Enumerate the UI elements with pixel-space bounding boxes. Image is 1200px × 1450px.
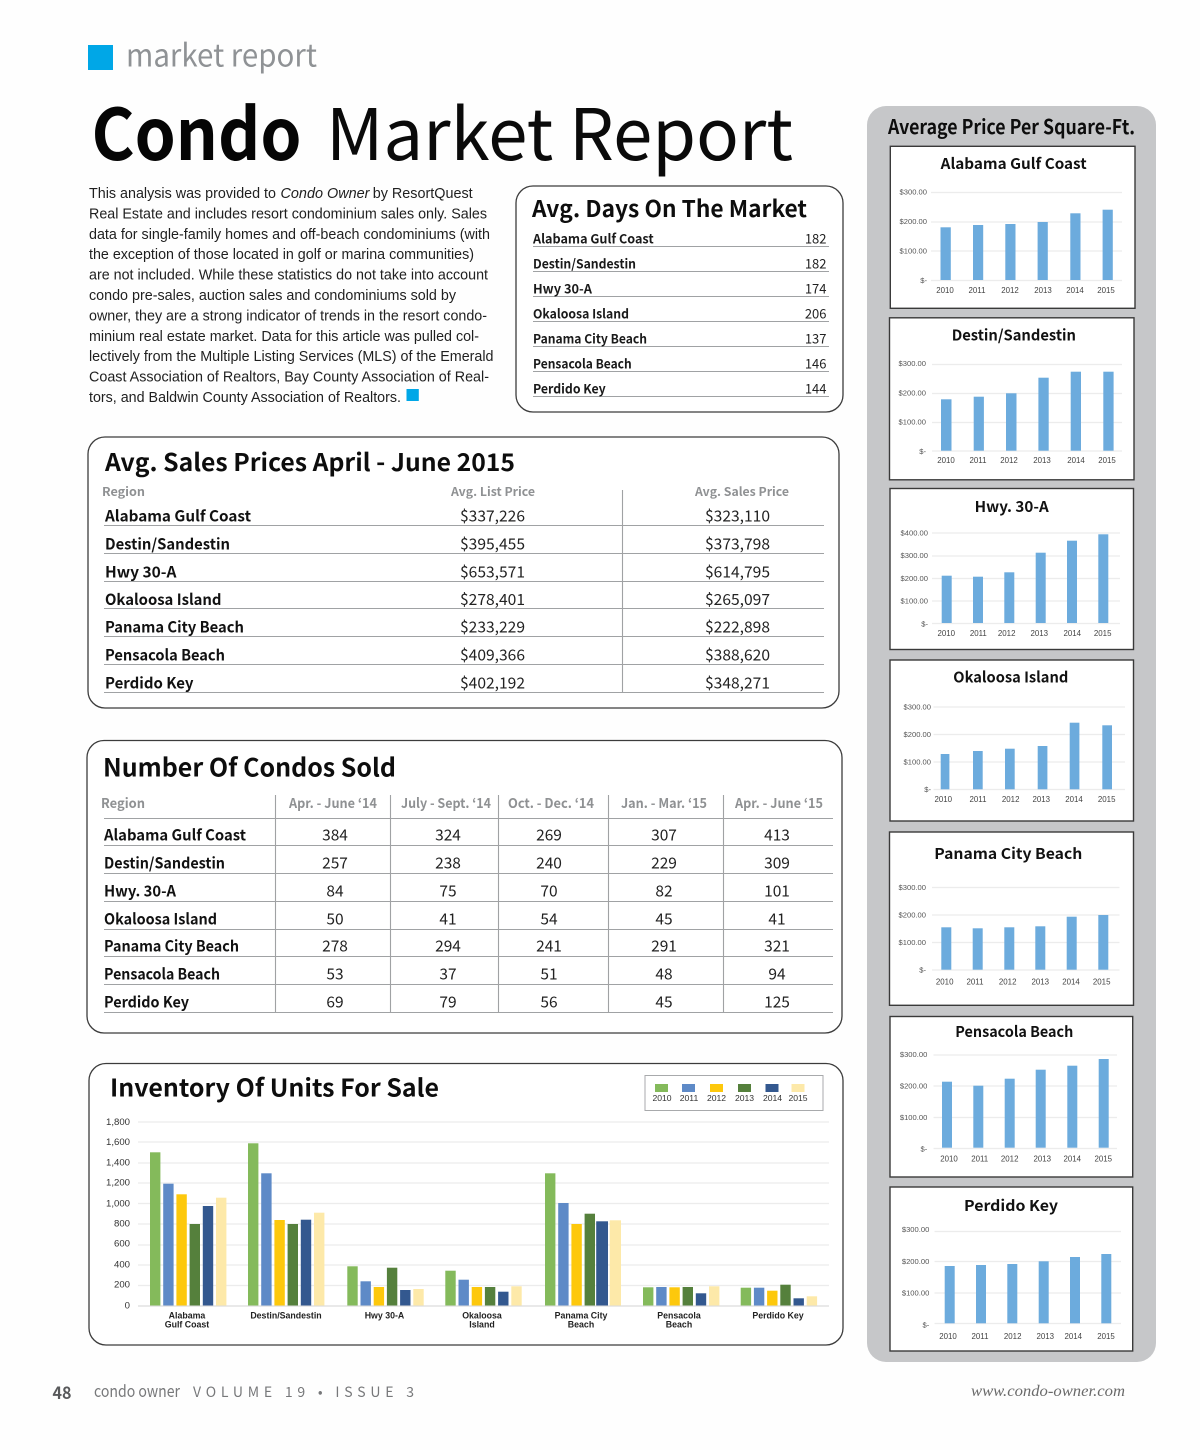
table header: July - Sept. ‘14 (401, 792, 491, 812)
bars: Panama City Beach (545, 1173, 621, 1306)
chart: Panama City Beach: 2012 (999, 978, 1016, 986)
table: sales prices by region: $409,366 (460, 644, 525, 666)
intro text block: Real Estate and includes resort condominium sales only. Sales (89, 205, 487, 222)
chart: Panama City Beach: 2014 (1062, 978, 1080, 986)
table: condos sold by region: 241 (536, 934, 562, 956)
chart: Perdido Key: $200.00 (902, 1257, 929, 1266)
table: condos sold by region: 54 (540, 908, 558, 930)
table: condos sold by region: 50 (326, 908, 344, 930)
chart: Hwy. 30-A: $300.00 (901, 551, 928, 560)
chart: Destin/Sandestin: Destin/Sandestin (952, 325, 1076, 346)
table: sales prices by region: $337,226 (460, 504, 525, 526)
bars: Perdido Key (741, 1285, 817, 1306)
legend: 2010 (652, 1093, 672, 1103)
table header: Jan. - Mar. ‘15 (621, 792, 707, 812)
table: condos sold by region (103, 795, 833, 1012)
table: sales prices by region: $402,192 (460, 672, 525, 694)
table: condos sold by region: 69 (326, 990, 344, 1012)
bar chart: inventory by region: 600 (114, 1238, 130, 1250)
chart: Pensacola Beach: $200.00 (900, 1082, 927, 1090)
chart: Panama City Beach: 2015 (1093, 978, 1111, 986)
chart: Alabama Gulf Coast: 2013 (1034, 286, 1052, 295)
intro text block: tors, and Baldwin County Association of Realtors. (89, 389, 401, 406)
chart: Destin/Sandestin: $- (919, 447, 926, 456)
chart: Hwy. 30-A: 2014 (1064, 629, 1082, 638)
table: days by region: 182 (805, 254, 826, 272)
chart: Panama City Beach: $200.00 (899, 910, 926, 920)
table: condos sold by region: Pensacola Beach (104, 962, 220, 984)
chart: Hwy. 30-A: $200.00 (901, 574, 928, 583)
chart: Panama City Beach: 2011 (967, 978, 983, 986)
table: condos sold by region: 125 (764, 990, 790, 1012)
table: days by region: 146 (805, 354, 826, 372)
table: condos sold by region: 229 (651, 852, 677, 874)
category labels: Alabama (169, 1310, 205, 1320)
chart: Perdido Key: 2012 (1004, 1332, 1021, 1341)
table: sales prices by region: Okaloosa Island (105, 588, 222, 610)
chart: Panama City Beach: 2010 (936, 978, 954, 986)
legend: 2014 (763, 1093, 782, 1103)
chart: Alabama Gulf Coast: $100.00 (900, 246, 927, 256)
chart: Perdido Key: 2011 (972, 1332, 988, 1341)
category labels: Okaloosa (462, 1310, 502, 1320)
table: sales prices by region: $323,110 (705, 504, 770, 526)
table: condos sold by region: 384 (322, 824, 348, 846)
table: condos sold by region: Hwy. 30-A (104, 880, 176, 902)
bar chart: inventory by region: 1,200 (106, 1178, 130, 1188)
table: condos sold by region: Perdido Key (104, 990, 189, 1012)
table: condos sold by region: 48 (655, 962, 673, 984)
chart: Perdido Key: 2010 (939, 1332, 957, 1341)
table: condos sold by region: 101 (764, 880, 790, 902)
chart: Hwy. 30-A: 2010 (938, 629, 956, 638)
chart: Pensacola Beach: 2010 (940, 1154, 958, 1164)
category labels: Beach (666, 1320, 692, 1330)
bar chart: inventory by region: 1,800 (106, 1117, 130, 1128)
legend: 2013 (735, 1093, 754, 1103)
chart: Alabama Gulf Coast: $200.00 (900, 217, 927, 226)
bar chart: inventory by region: 400 (114, 1260, 130, 1270)
table: condos sold by region: 70 (540, 880, 558, 902)
table: days by region: 144 (805, 378, 826, 398)
bar chart: inventory by region: 200 (114, 1280, 130, 1290)
chart: Panama City Beach: Panama City Beach (934, 843, 1082, 864)
table: condos sold by region: 51 (540, 962, 558, 984)
footer: website: www.condo-owner.com (971, 1383, 1125, 1400)
footer: page number and issue: condo owner (94, 1378, 180, 1402)
intro text block: lectively from the Multiple Listing Services (MLS) of the Emerald (89, 348, 494, 365)
table: sales prices by region: Hwy 30-A (105, 560, 177, 582)
table: condos sold by region: 56 (540, 990, 558, 1012)
chart: Hwy. 30-A: $400.00 (901, 528, 928, 538)
legend: 2015 (788, 1093, 808, 1103)
table: condos sold by region: 324 (435, 824, 461, 846)
chart: Destin/Sandestin: 2010 (937, 456, 955, 465)
chart: Hwy. 30-A: $- (921, 620, 928, 628)
table header: Avg. List Price (450, 483, 535, 500)
title: Condo (92, 79, 302, 181)
table: sales prices by region: $222,898 (705, 616, 770, 638)
table: condos sold by region: Panama City Beach (104, 934, 239, 956)
table: sales prices by region: $278,401 (460, 588, 525, 610)
category labels: Island (469, 1320, 495, 1330)
heading: inventory of units: Inventory Of Units For Sale (110, 1070, 439, 1104)
bars: Okaloosa Island (445, 1271, 522, 1306)
intro text block: minium real estate market. Data for this article was pulled col- (89, 328, 479, 345)
table header: Region (101, 792, 145, 812)
title continuation: Market Report (326, 79, 793, 181)
chart: Alabama Gulf Coast: $- (920, 276, 927, 285)
chart: Perdido Key: $100.00 (902, 1288, 929, 1298)
table: condos sold by region: 321 (764, 934, 790, 956)
table: sales prices by region: Pensacola Beach (105, 644, 225, 666)
table: sales prices by region: $233,229 (460, 616, 525, 638)
legend: 2012 (707, 1093, 726, 1103)
table header: Region (102, 483, 145, 500)
table: days by region: 206 (805, 304, 826, 322)
heading: average price per square-ft: Average Price Per Square-Ft. (887, 111, 1135, 140)
table: condos sold by region: 82 (655, 880, 673, 902)
chart: Okaloosa Island (890, 660, 1134, 821)
bars: Pensacola Beach (643, 1286, 719, 1306)
chart: Perdido Key: Perdido Key (964, 1195, 1058, 1216)
chart: Destin/Sandestin: $100.00 (899, 418, 926, 426)
chart: Hwy. 30-A: 2015 (1094, 629, 1112, 638)
intro text block: data for single-family homes and off-beach condominiums (with (89, 226, 490, 243)
category labels: Destin/Sandestin (250, 1310, 322, 1320)
footer: page number and issue: VOLUME 19 • ISSUE 3 (193, 1382, 414, 1402)
table: days by region: Hwy 30-A (533, 278, 593, 298)
chart: Alabama Gulf Coast: 2015 (1097, 286, 1115, 295)
table: sales prices by region: Perdido Key (105, 672, 194, 694)
chart: Hwy. 30-A: 2011 (970, 629, 987, 638)
table: days by region: 174 (805, 278, 826, 298)
chart: Pensacola Beach: Pensacola Beach (955, 1021, 1073, 1042)
table: condos sold by region: 278 (322, 934, 348, 956)
chart: Panama City Beach: $300.00 (899, 883, 926, 892)
table: condos sold by region: 37 (439, 962, 457, 984)
table: condos sold by region: 257 (322, 852, 348, 874)
table: condos sold by region: 94 (768, 962, 786, 984)
chart: Panama City Beach: $- (919, 966, 926, 974)
table: condos sold by region: Destin/Sandestin (104, 852, 225, 874)
bar chart: inventory by region: 1,000 (106, 1198, 130, 1210)
chart: Destin/Sandestin: 2011 (970, 456, 986, 465)
bars: Alabama Gulf Coast (150, 1152, 226, 1306)
intro text block (89, 185, 494, 406)
intro text block: Condo Owner (280, 185, 370, 202)
intro text block: the exception of those located in golf or marina communities) (89, 246, 474, 263)
chart: Pensacola Beach: 2013 (1034, 1154, 1052, 1164)
bar chart: inventory by region: 800 (114, 1218, 130, 1230)
heading: number of condos sold: Number Of Condos Sold (103, 748, 396, 784)
table: sales prices by region: Destin/Sandestin (105, 532, 230, 554)
table: days by region: Pensacola Beach (533, 354, 632, 372)
table: condos sold by region: 41 (439, 908, 457, 930)
chart: Okaloosa Island: 2010 (935, 795, 953, 804)
chart: Perdido Key: $300.00 (902, 1225, 929, 1234)
chart: Okaloosa Island: $200.00 (904, 730, 931, 739)
chart: Okaloosa Island: Okaloosa Island (953, 666, 1068, 687)
chart: Pensacola Beach (890, 1016, 1133, 1177)
table: sales prices by region: Alabama Gulf Coast (104, 504, 252, 526)
panel: average days on the market (516, 186, 843, 412)
chart: Hwy. 30-A: 2012 (998, 629, 1015, 638)
chart: Hwy. 30-A: Hwy. 30-A (975, 496, 1049, 517)
table: condos sold by region: 307 (651, 824, 677, 846)
table: condos sold by region: 79 (439, 990, 457, 1012)
table: sales prices by region: Panama City Beach (105, 616, 244, 638)
chart: Destin/Sandestin: $200.00 (899, 388, 926, 398)
bar chart: inventory by region: 0 (125, 1300, 130, 1312)
bar chart: inventory by region: 1,600 (106, 1137, 130, 1148)
table: sales prices by region (104, 490, 824, 694)
category labels (165, 1310, 804, 1330)
chart: Hwy. 30-A: 2013 (1031, 629, 1049, 638)
chart: Pensacola Beach: 2014 (1064, 1154, 1082, 1164)
section tag: market report: market report (126, 30, 317, 76)
table: condos sold by region: 240 (536, 852, 562, 874)
chart: Okaloosa Island: $100.00 (904, 758, 931, 766)
table: condos sold by region: Alabama Gulf Coast (103, 824, 247, 846)
panel: average sales prices (88, 437, 839, 708)
intro text block: condo pre-sales, auction sales and condominiums sold by (89, 287, 456, 304)
intro text block: owner, they are a strong indicator of trends in the resort condo- (89, 307, 487, 324)
legend: 2011 (680, 1093, 698, 1103)
table: condos sold by region: 84 (326, 880, 344, 902)
chart: Okaloosa Island: 2013 (1033, 795, 1051, 804)
category labels: Pensacola (657, 1310, 701, 1320)
chart: Perdido Key: 2014 (1065, 1332, 1083, 1341)
table: sales prices by region: $614,795 (705, 560, 770, 582)
table: days by region: Perdido Key (533, 378, 606, 398)
chart: Pensacola Beach: $- (921, 1144, 928, 1154)
panel: average price per square foot (867, 106, 1156, 1362)
table: condos sold by region: 309 (764, 852, 790, 874)
chart: Alabama Gulf Coast: 2011 (969, 286, 985, 295)
table: condos sold by region: 413 (764, 824, 790, 846)
category labels: Beach (568, 1320, 594, 1330)
chart: Panama City Beach (890, 832, 1134, 1005)
intro text block: This analysis was provided to (89, 185, 276, 202)
table: days by region: Panama City Beach (533, 328, 647, 348)
chart: Perdido Key: 2015 (1097, 1332, 1115, 1341)
chart: Pensacola Beach: $100.00 (900, 1113, 927, 1122)
table: sales prices by region: $348,271 (705, 672, 770, 694)
chart: Destin/Sandestin: 2012 (1000, 456, 1018, 465)
bar chart: inventory by region: 1,400 (106, 1158, 130, 1168)
category labels: Gulf Coast (165, 1320, 209, 1330)
heading: avg days on the market: Avg. Days On The Market (531, 190, 807, 224)
table header (101, 792, 823, 812)
chart: Okaloosa Island: $- (924, 785, 931, 794)
panel: number of condos sold (87, 740, 842, 1033)
legend (645, 1076, 823, 1110)
table: sales prices by region: $395,455 (460, 532, 525, 554)
chart: Alabama Gulf Coast: Alabama Gulf Coast (940, 153, 1087, 174)
bars: Hwy 30-A (347, 1266, 424, 1306)
chart: Okaloosa Island: 2012 (1002, 795, 1019, 804)
table header: Oct. - Dec. ‘14 (508, 792, 594, 812)
table: condos sold by region: 75 (439, 880, 457, 902)
category labels: Panama City (555, 1310, 608, 1320)
table: sales prices by region: $373,798 (705, 532, 770, 554)
chart: Perdido Key (890, 1187, 1133, 1351)
chart: Alabama Gulf Coast (890, 146, 1135, 308)
chart: Pensacola Beach: 2015 (1095, 1154, 1113, 1164)
chart: Pensacola Beach: 2011 (971, 1154, 988, 1164)
table: sales prices by region: $265,097 (705, 588, 770, 610)
chart: Okaloosa Island: 2011 (970, 795, 986, 804)
table: condos sold by region: 294 (435, 934, 461, 956)
chart: Panama City Beach: 2013 (1032, 978, 1050, 986)
chart: Alabama Gulf Coast: 2012 (1001, 286, 1019, 295)
chart: Okaloosa Island: 2015 (1098, 795, 1116, 804)
chart: Destin/Sandestin (890, 318, 1134, 480)
chart: Destin/Sandestin: $300.00 (899, 359, 926, 368)
chart: Perdido Key: 2013 (1037, 1332, 1055, 1341)
intro text block: Coast Association of Realtors, Bay County Association of Real- (89, 369, 489, 386)
footer: page number and issue: 48 (52, 1379, 72, 1404)
chart: Pensacola Beach: $300.00 (900, 1050, 927, 1059)
chart: Perdido Key: $- (923, 1320, 930, 1330)
chart: Pensacola Beach: 2012 (1001, 1154, 1018, 1164)
table: condos sold by region: 238 (435, 852, 461, 874)
panel: inventory of units for sale (89, 1064, 843, 1345)
chart: Panama City Beach: $100.00 (899, 938, 926, 947)
chart: Destin/Sandestin: 2015 (1098, 456, 1116, 465)
table: sales prices by region: $653,571 (460, 560, 525, 582)
table: condos sold by region: Okaloosa Island (104, 908, 217, 930)
intro text block: are not included. While these statistics do not take into account (89, 267, 489, 284)
chart: Hwy. 30-A (890, 488, 1134, 650)
table: condos sold by region: 45 (655, 908, 673, 930)
category labels: Hwy 30-A (365, 1310, 405, 1320)
chart: Hwy. 30-A: $100.00 (901, 596, 928, 606)
bar chart: inventory by region (106, 1117, 829, 1330)
bars: Destin/Sandestin (248, 1143, 324, 1306)
table: days by region: Alabama Gulf Coast (532, 228, 654, 248)
table: condos sold by region: 45 (655, 990, 673, 1012)
table: condos sold by region: 53 (326, 962, 344, 984)
table: sales prices by region: $388,620 (705, 644, 770, 666)
table header: Apr. - June ‘15 (734, 792, 823, 812)
chart: Destin/Sandestin: 2014 (1067, 456, 1085, 465)
chart: Alabama Gulf Coast: 2014 (1066, 286, 1084, 295)
heading: avg sales prices: Avg. Sales Prices April - June 2015 (104, 444, 515, 479)
table: condos sold by region: 291 (651, 934, 677, 956)
table: days by region: 182 (805, 228, 826, 248)
table: days by region (532, 228, 829, 398)
table: days by region: 137 (805, 328, 826, 348)
chart: Okaloosa Island: $300.00 (904, 702, 931, 712)
chart: Okaloosa Island: 2014 (1065, 795, 1083, 804)
table: days by region: Okaloosa Island (533, 304, 629, 322)
table header (102, 483, 789, 500)
category labels: Perdido Key (752, 1310, 804, 1320)
chart: Alabama Gulf Coast: $300.00 (900, 188, 927, 196)
table: condos sold by region: 269 (536, 824, 562, 846)
intro text block: by ResortQuest (373, 185, 473, 202)
chart: Destin/Sandestin: 2013 (1033, 456, 1051, 465)
table: condos sold by region: 41 (768, 908, 786, 930)
table: days by region: Destin/Sandestin (533, 254, 636, 272)
footer: page number and issue (52, 1378, 414, 1404)
table header: Apr. - June ‘14 (288, 792, 377, 812)
table header: Avg. Sales Price (694, 483, 789, 500)
chart: Alabama Gulf Coast: 2010 (936, 286, 954, 295)
